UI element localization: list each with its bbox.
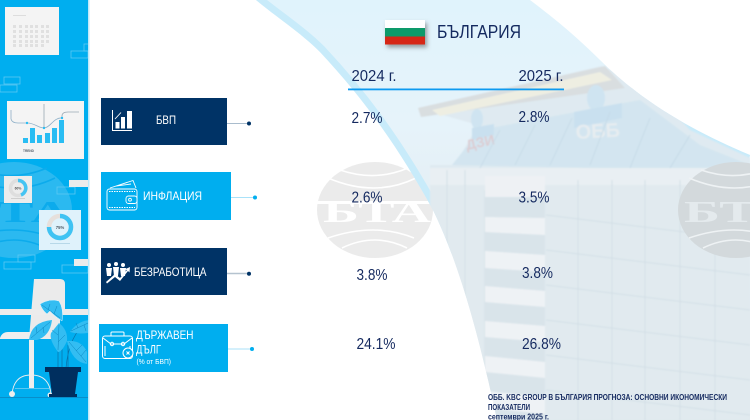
- BTA watermark logo centre: БТА: [323, 194, 432, 229]
- values table: 2.6%: [352, 190, 383, 206]
- icon: briefcase with x: [102, 332, 133, 358]
- row: Инфлация: [101, 172, 257, 220]
- BTA watermark logo centre: [317, 162, 433, 258]
- row: Държавен дълг: ДЪЛГ: [136, 342, 161, 356]
- sidebar BTA watermark: [0, 162, 72, 258]
- row: БВП: [101, 98, 251, 145]
- column headers: 2025 г.: [518, 68, 564, 85]
- icon: people with rising arrow: [106, 262, 130, 284]
- row: Безработица: БЕЗРАБОТИЦА: [134, 265, 206, 279]
- background photo: building in curved shape: ДЗИ: [464, 131, 496, 153]
- source note: ПОКАЗАТЕЛИ: [488, 403, 530, 412]
- values table: 24.1%: [356, 336, 396, 353]
- values table: 3.8%: [522, 265, 553, 282]
- icon: bar chart: [112, 110, 132, 130]
- icon: wallet: [107, 180, 137, 210]
- values table: 3.5%: [518, 190, 550, 206]
- row: Държавен дълг: [99, 324, 254, 372]
- row: Държавен дълг: ДЪРЖАВЕН: [136, 328, 194, 342]
- calendar card: [5, 7, 59, 55]
- values table: 2.7%: [352, 110, 383, 127]
- BTA watermark logo right: БТА: [684, 194, 750, 229]
- background photo: building in curved shape: [250, 0, 750, 420]
- source note: [488, 393, 727, 420]
- row: БВП: БВП: [156, 115, 176, 127]
- donut card 1: [4, 176, 32, 203]
- trend chart card: [7, 101, 84, 159]
- donut card 1: 60%: [15, 186, 21, 190]
- icon: Bulgarian flag: [385, 20, 425, 44]
- values table: 3.8%: [356, 267, 388, 284]
- values table: 26.8%: [522, 336, 561, 353]
- donut card 2: 75%: [56, 225, 64, 230]
- column headers: 2024 г.: [352, 68, 396, 85]
- row: Държавен дълг: (% от БВП): [136, 359, 171, 366]
- BTA watermark logo right: [678, 162, 750, 258]
- column headers: [348, 68, 564, 90]
- heading: flag and country name: БЪЛГАРИЯ: [437, 22, 521, 42]
- office chair: [0, 279, 88, 398]
- background photo: building in curved shape: ОББ: [575, 120, 621, 144]
- donut card 2: [39, 210, 81, 250]
- values table: [352, 109, 561, 353]
- potted plant: [29, 300, 92, 397]
- row: Инфлация: ИНФЛАЦИЯ: [143, 189, 202, 203]
- trend chart card: TREND: [23, 149, 35, 153]
- heading: flag and country name: [385, 20, 521, 44]
- panel: left sidebar illustration: [0, 0, 92, 420]
- values table: 2.8%: [518, 109, 550, 126]
- row: Безработица: [101, 248, 251, 295]
